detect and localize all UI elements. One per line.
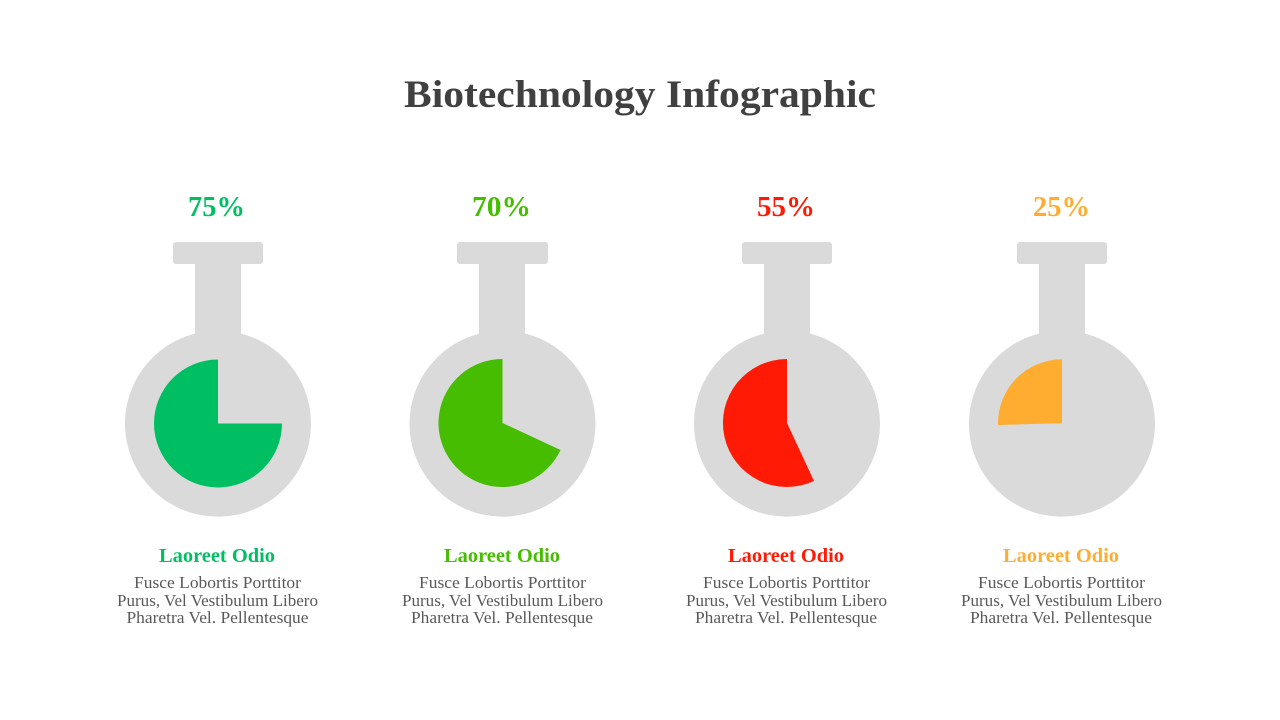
panel: 25% flask: [961, 191, 1162, 627]
description: Fusce Lobortis Porttitor: [978, 573, 1146, 592]
description: Pharetra Vel. Pellentesque: [970, 608, 1152, 627]
description: Purus, Vel Vestibulum Libero: [117, 591, 318, 610]
description: [961, 573, 1162, 627]
percentage: 75%: 75%: [188, 191, 245, 223]
pie: 25% fill: [998, 359, 1062, 425]
icon: flask: [125, 242, 311, 517]
percentage: 55%: 55%: [757, 191, 815, 223]
label: Laoreet Odio: [444, 545, 560, 567]
label: Laoreet Odio: [1003, 545, 1119, 567]
description: Pharetra Vel. Pellentesque: [411, 608, 593, 627]
pie: 70% fill: [438, 359, 560, 487]
icon: flask: [969, 242, 1155, 517]
panel: 70% flask: [402, 191, 603, 627]
percentage: 25%: 25%: [1033, 191, 1090, 223]
pie: 55% fill: [723, 359, 814, 487]
pie: 75% fill: [154, 360, 282, 488]
title: Biotechnology Infographic: [404, 73, 876, 116]
description: Purus, Vel Vestibulum Libero: [961, 591, 1162, 610]
description: [117, 573, 318, 627]
description: Fusce Lobortis Porttitor: [703, 573, 871, 592]
panel: 75% flask: [117, 191, 318, 627]
description: [686, 573, 887, 627]
percentage: 70%: 70%: [472, 191, 531, 223]
panel: 55% flask: [686, 191, 887, 627]
description: [402, 573, 603, 627]
label: Laoreet Odio: [728, 545, 844, 567]
label: Laoreet Odio: [159, 545, 275, 567]
description: Fusce Lobortis Porttitor: [419, 573, 587, 592]
icon: flask: [410, 242, 596, 517]
icon: flask: [694, 242, 880, 517]
description: Pharetra Vel. Pellentesque: [126, 608, 308, 627]
description: Purus, Vel Vestibulum Libero: [402, 591, 603, 610]
description: Purus, Vel Vestibulum Libero: [686, 591, 887, 610]
description: Fusce Lobortis Porttitor: [134, 573, 302, 592]
description: Pharetra Vel. Pellentesque: [695, 608, 877, 627]
